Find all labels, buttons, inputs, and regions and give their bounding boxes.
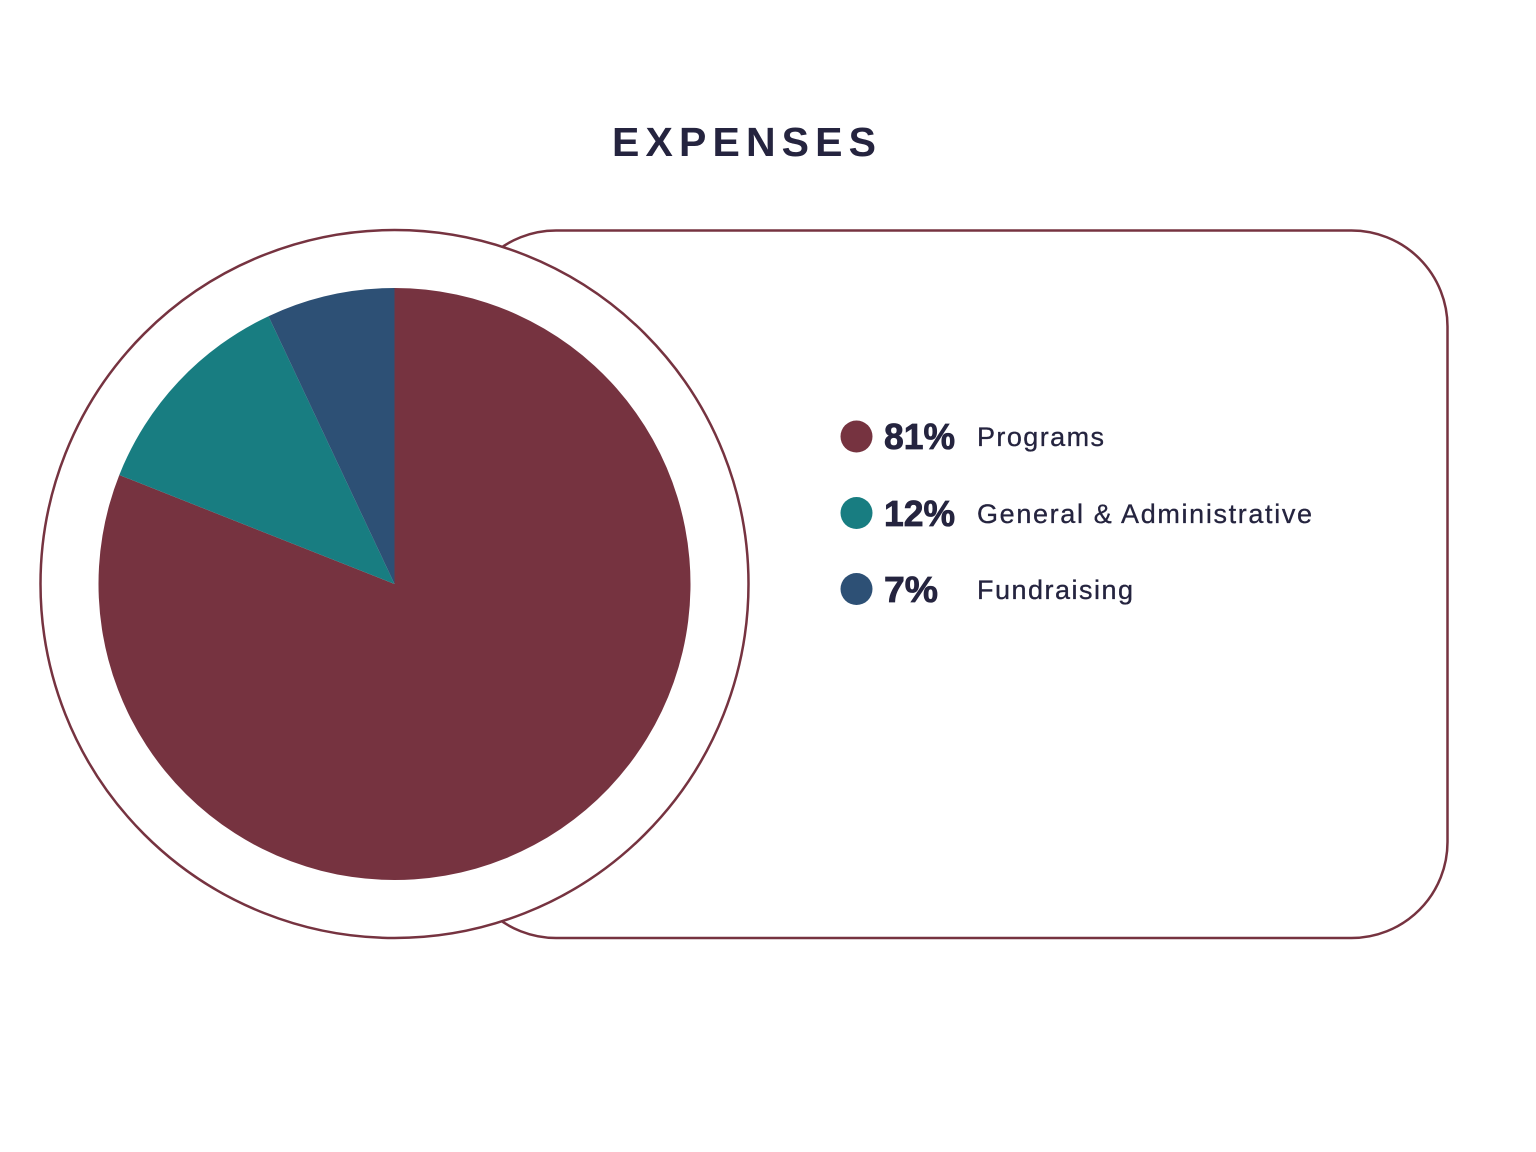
label: General & Administrative: General & Administrative	[977, 499, 1312, 529]
label: Fundraising: Fundraising	[977, 575, 1133, 605]
title: EXPENSES	[612, 119, 876, 165]
panel: legend card	[460, 230, 1448, 938]
pie slice: General & Administrative 12%	[119, 316, 395, 584]
value: 81%: 81%	[884, 416, 955, 457]
pie slice: Fundraising 7%	[268, 288, 394, 584]
legend row: General & Administrative	[840, 493, 1312, 534]
pie slice: Programs 81%	[98, 288, 690, 880]
value: 7%: 7%	[884, 569, 938, 610]
legend row: Fundraising	[840, 569, 1133, 610]
value: 12%: 12%	[884, 493, 955, 534]
legend row: Programs	[840, 416, 1104, 457]
label: Programs: Programs	[977, 422, 1104, 452]
pie chart	[40, 230, 748, 938]
legend dot: Programs	[840, 420, 872, 452]
pie outer ring	[40, 230, 748, 938]
legend dot: Fundraising	[840, 573, 872, 605]
legend dot: General & Administrative	[840, 497, 872, 529]
